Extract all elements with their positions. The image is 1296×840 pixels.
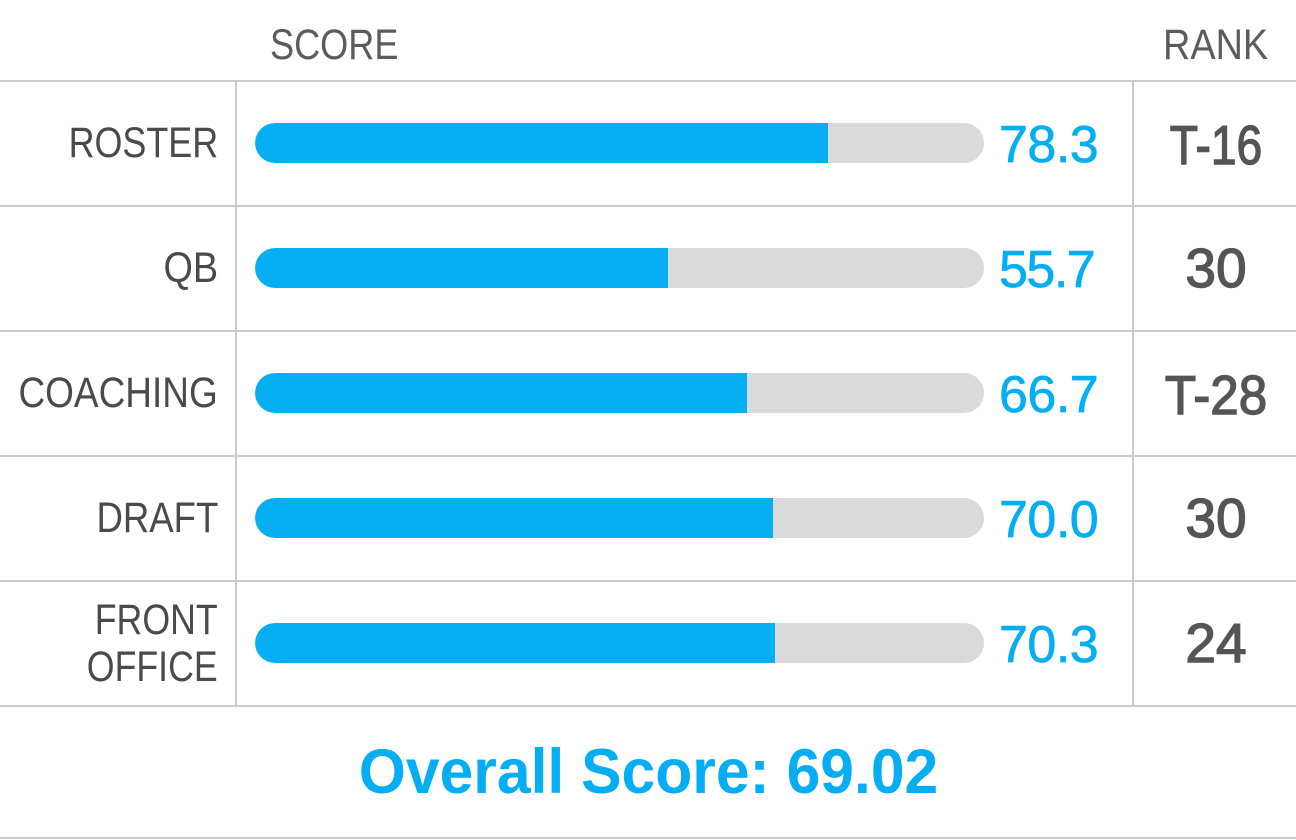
rank: coaching: T-28 xyxy=(1165,364,1267,426)
label: roster: ROSTER xyxy=(68,119,218,167)
label: front office: FRONT xyxy=(95,596,218,644)
row: draft xyxy=(96,487,1247,549)
label: coaching: COACHING xyxy=(19,369,218,417)
label: front office: OFFICE xyxy=(87,643,218,691)
bar: qb 55.7 xyxy=(255,248,984,288)
header: score: SCORE xyxy=(270,21,398,69)
bar: draft 70.0 xyxy=(255,498,984,538)
rank: roster: T-16 xyxy=(1170,114,1262,176)
label: front office xyxy=(87,596,218,691)
row: coaching xyxy=(19,364,1267,426)
row: roster xyxy=(68,114,1262,176)
row: front office xyxy=(87,596,1247,691)
rank: front office: 24 xyxy=(1185,612,1247,674)
label: qb: QB xyxy=(163,244,218,292)
bar: front office 70.3 xyxy=(255,623,984,663)
value: front office: 70.3 xyxy=(999,616,1098,674)
label: draft: DRAFT xyxy=(96,494,218,542)
bar: roster 78.3 xyxy=(255,123,984,163)
value: draft: 70.0 xyxy=(999,491,1098,549)
value: coaching: 66.7 xyxy=(999,366,1098,424)
value: qb: 55.7 xyxy=(999,241,1094,299)
value: roster: 78.3 xyxy=(999,116,1098,174)
rank: qb: 30 xyxy=(1185,237,1247,299)
bar: coaching 66.7 xyxy=(255,373,984,413)
overall score: Overall Score: 69.02 xyxy=(359,737,938,807)
header: rank: RANK xyxy=(1163,21,1268,69)
row: qb xyxy=(163,237,1247,299)
rank: draft: 30 xyxy=(1185,487,1247,549)
